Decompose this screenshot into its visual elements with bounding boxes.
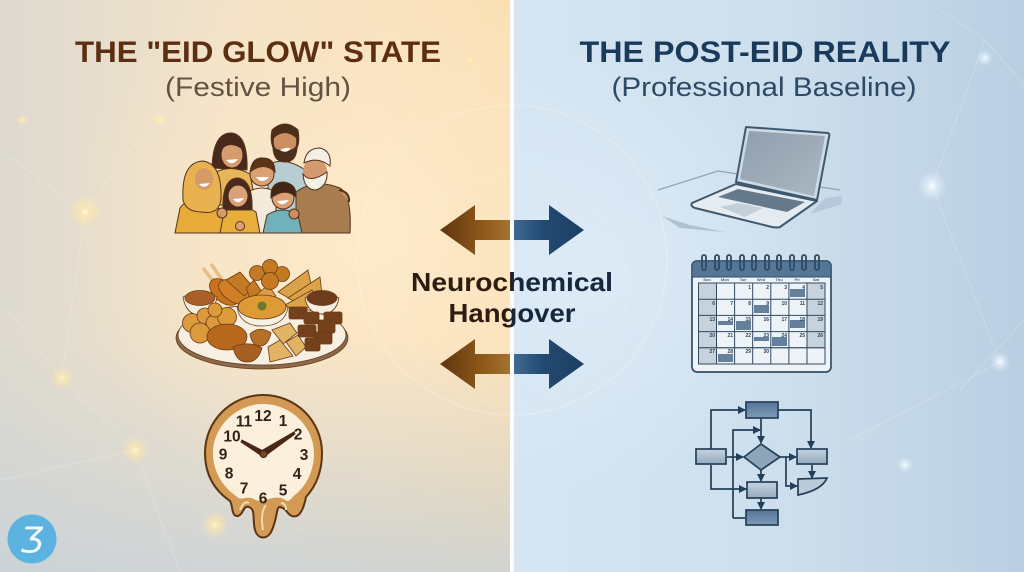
man — [268, 161, 312, 215]
weekend shading — [698, 283, 716, 364]
boy right — [263, 210, 302, 233]
title: left heading: THE "EID GLOW" STATE — [75, 36, 441, 69]
dates: 4 — [802, 285, 805, 291]
clock numerals: 2 — [294, 426, 302, 444]
dates — [709, 285, 823, 355]
icon: melting clock — [205, 395, 322, 538]
dates: 19 — [817, 317, 823, 323]
clock numerals: 1 — [279, 413, 288, 430]
dates: 20 — [709, 333, 715, 339]
woman — [212, 133, 247, 170]
icon: family group — [175, 124, 350, 233]
sweets — [268, 323, 306, 362]
weekday labels: Sun — [703, 277, 711, 282]
weekday labels: Fri — [794, 277, 800, 282]
weekday labels: Wed — [757, 277, 766, 282]
samosas — [278, 270, 322, 312]
left bowl — [183, 292, 217, 315]
icon: flowchart — [696, 402, 827, 525]
dates: 23 — [763, 333, 769, 339]
clock numerals: 10 — [223, 428, 241, 446]
dates: 18 — [799, 317, 805, 323]
weekday labels: Mon — [721, 277, 730, 282]
dates: 1 — [748, 285, 751, 291]
dates: 7 — [730, 301, 733, 307]
dates: 5 — [820, 285, 823, 291]
central faint rings — [357, 105, 667, 415]
subtitle: left: (Festive High) — [165, 72, 351, 102]
panel: right cool background — [514, 0, 1024, 572]
brownies — [289, 307, 342, 351]
girl — [220, 207, 260, 233]
dates: 6 — [712, 301, 715, 307]
dates: 10 — [781, 301, 787, 307]
icon: calendar — [692, 255, 831, 372]
elder — [296, 184, 350, 233]
dates: 17 — [781, 317, 787, 323]
clock numerals: 6 — [259, 490, 268, 508]
boy centre — [248, 188, 276, 233]
dates: 26 — [817, 333, 823, 339]
dates: 27 — [709, 349, 715, 355]
weekday labels: Thu — [775, 277, 783, 282]
weekday labels: Sat — [813, 277, 820, 282]
divider — [510, 0, 514, 572]
logo badge: Ʒ — [20, 521, 44, 561]
center label: Neurochemical Hangover: Hangover — [448, 298, 576, 328]
right bowl — [305, 293, 339, 314]
dates: 21 — [727, 333, 733, 339]
hands — [289, 209, 299, 219]
dates: 16 — [763, 317, 769, 323]
dates: 30 — [763, 349, 769, 355]
clock numerals: 12 — [254, 408, 272, 425]
dates: 29 — [745, 349, 751, 355]
dates: 2 — [766, 285, 769, 291]
calendar rings — [702, 255, 819, 270]
clock numerals: 5 — [279, 482, 288, 500]
center label: Neurochemical Hangover: Neurochemical — [411, 267, 613, 297]
logo badge — [8, 514, 56, 564]
centre bowl — [237, 300, 288, 326]
arrow: bottom right — [514, 339, 584, 389]
weekday labels: Tue — [740, 277, 747, 282]
dates: 12 — [817, 301, 823, 307]
hijab woman — [175, 199, 226, 233]
arrow: top right — [514, 205, 584, 255]
dates: 9 — [766, 301, 769, 307]
event blocks — [718, 289, 805, 362]
center label: Neurochemical Hangover — [411, 267, 613, 328]
icon: food platter — [176, 260, 348, 369]
dates: 11 — [800, 301, 805, 307]
weekday labels — [703, 277, 820, 282]
icon: laptop on desk — [658, 127, 842, 232]
chicken — [203, 264, 228, 293]
dates: 22 — [745, 333, 751, 339]
dates: 8 — [748, 301, 751, 307]
arrow: top left — [440, 205, 510, 255]
dates: 24 — [781, 333, 787, 339]
clock numerals: 9 — [219, 446, 228, 464]
clock numerals: 3 — [300, 447, 309, 464]
clock hands — [241, 432, 295, 456]
clock numerals: 4 — [293, 466, 302, 483]
title: right heading: THE POST-EID REALITY — [580, 36, 950, 69]
clock numerals — [219, 408, 309, 508]
subtitle: right: (Professional Baseline) — [612, 72, 916, 102]
calendar grid — [698, 283, 825, 364]
clock numerals: 11 — [236, 414, 253, 430]
panel: left warm background — [0, 0, 510, 572]
arrow: bottom left — [440, 339, 510, 389]
clock numerals: 8 — [225, 466, 234, 482]
dates: 15 — [745, 317, 751, 323]
dates: 28 — [727, 349, 733, 355]
dates: 13 — [709, 317, 715, 323]
clock numerals: 7 — [240, 480, 248, 498]
dates: 25 — [799, 333, 805, 339]
dates: 14 — [727, 317, 733, 323]
dates: 3 — [784, 285, 787, 291]
snacks top — [226, 260, 290, 302]
fritters — [182, 303, 236, 343]
